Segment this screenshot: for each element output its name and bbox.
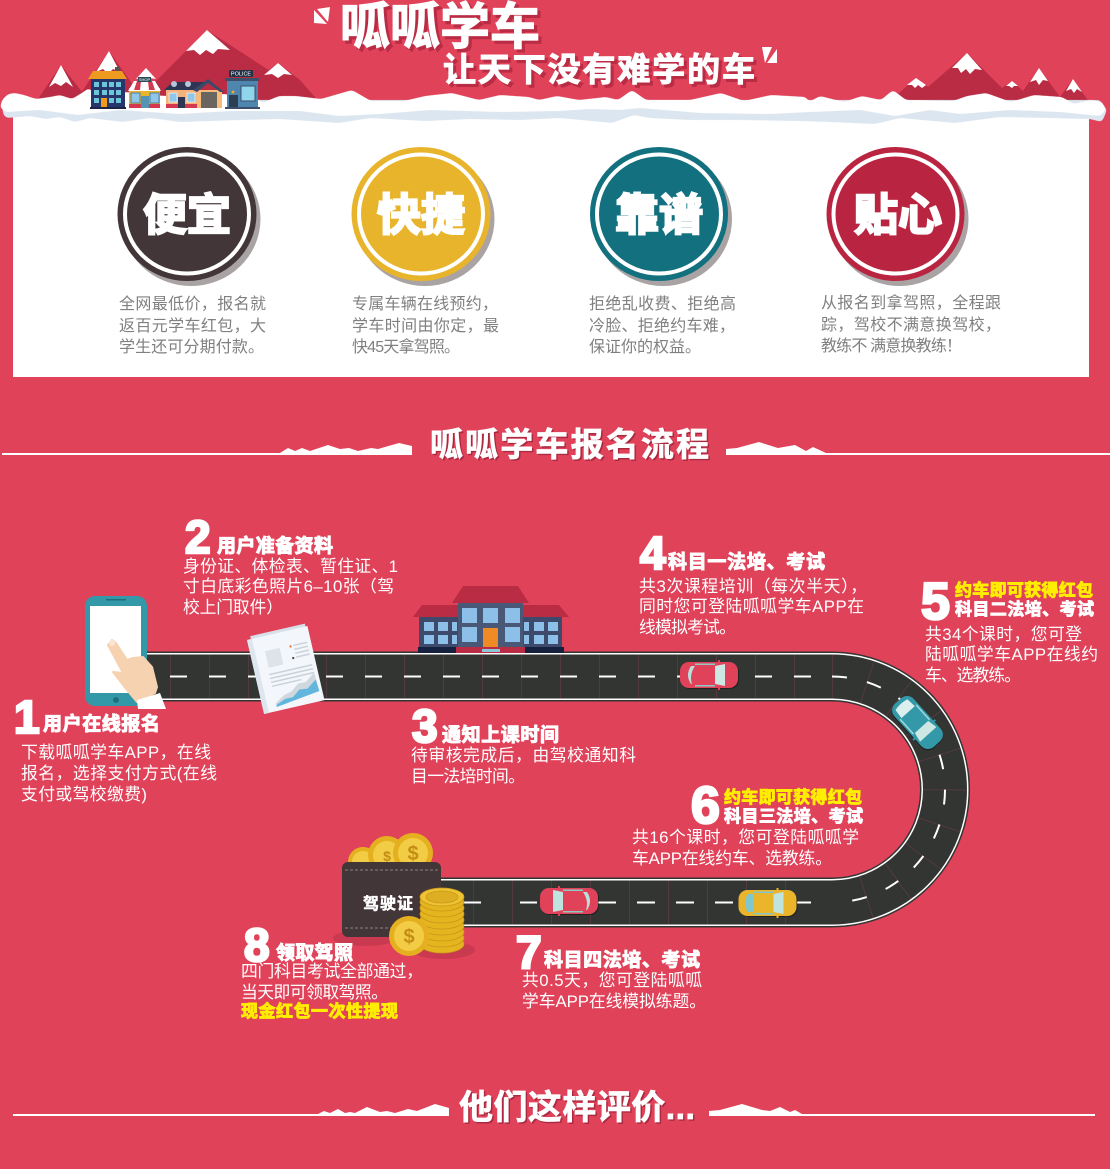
icon: house with garage (164, 79, 224, 108)
heading: enrolment process: 呱呱学车报名流程 (430, 426, 709, 463)
icon: red car, upper road (680, 660, 739, 690)
header mountains: left (36, 30, 321, 104)
step 2: 校上门取件） (183, 598, 283, 617)
heading: reviews (13, 1089, 1095, 1128)
title: 呱呱学车 (343, 2, 543, 58)
step 6: 车APP在线约车、选教练。 (632, 849, 832, 868)
icon: red car, lower road (540, 886, 599, 916)
road (146, 676, 945, 902)
icon: document (246, 623, 325, 714)
step 4: 4 (640, 527, 666, 579)
step 1: 用户在线报名 (43, 712, 160, 735)
step 8: 四门科目考试全部通过， (241, 962, 423, 981)
icon: buildings row (88, 67, 260, 109)
step 2: 2 (185, 511, 211, 563)
step 5: 5 (921, 573, 950, 631)
step 7: 科目四法培、考试 (544, 948, 700, 971)
step 6 (632, 777, 863, 868)
icon: front coin: $ (403, 926, 415, 948)
icon: right sparkle (762, 47, 777, 63)
title: 让天下没有难学的车 (446, 54, 758, 91)
icon: office building (88, 67, 127, 109)
step 6: 科目三法培、考试 (724, 806, 863, 826)
step 3 (411, 700, 636, 786)
step 8: 8 (244, 919, 270, 971)
icon: coins behind wallet: $ (383, 848, 391, 864)
step 3: 待审核完成后，由驾校通知科 (411, 746, 636, 765)
step 8 (241, 919, 423, 1021)
heading: enrolment process: 呱呱学车报名流程 (432, 428, 710, 464)
step 6: 共16个课时，您可登陆呱呱学 (632, 828, 859, 847)
text: fast: 专属车辆在线预约， (352, 295, 498, 313)
text: caring: 从报名到拿驾照，全程跟 (821, 293, 1001, 312)
title: 呱呱学车 (340, 0, 540, 55)
heading: reviews: 他们这样评价... (460, 1090, 696, 1128)
icon: coins behind wallet (348, 833, 433, 877)
step 1: 1 (14, 691, 40, 743)
text: reliable: 冷脸、拒绝约车难， (589, 317, 735, 335)
white benefits panel background (13, 112, 1089, 377)
step 2: 寸白底彩色照片6–10张（驾 (183, 577, 394, 596)
text: caring: 教练不 满意换教练！ (821, 336, 962, 355)
step 5: 科目二法培、考试 (955, 599, 1094, 619)
step 1: 支付或驾校缴费) (21, 785, 147, 804)
icon: coins behind wallet: $ (407, 843, 419, 865)
text: reliable: 保证你的权益。 (589, 338, 701, 356)
badge: reliable (590, 147, 732, 286)
icon: school building (413, 586, 569, 653)
step 5: 车、选教练。 (925, 666, 1021, 685)
icon: shop (128, 77, 161, 108)
step 7: 共0.5天，您可登陆呱呱 (522, 971, 702, 990)
step 3: 通知上课时间 (442, 724, 559, 746)
icon: left sparkle (314, 7, 330, 24)
icon: yellow car (738, 888, 798, 918)
step 8: 现金红包一次性提现 (241, 1001, 398, 1021)
step 4: 共3次课程培训（每次半天）， (639, 577, 867, 596)
text: fast (352, 295, 499, 356)
step 1 (14, 691, 217, 804)
step 6: 约车即可获得红包 (724, 787, 862, 807)
step 4 (639, 527, 867, 637)
step 2: 身份证、体检表、暂住证、1 (183, 557, 398, 576)
text: caring (821, 293, 1001, 355)
text: reliable: 拒绝乱收费、拒绝高 (589, 295, 736, 313)
step 2 (183, 511, 398, 617)
header mountains: right (897, 53, 1092, 106)
text: cheap: 返百元学车红包，大 (119, 317, 266, 335)
title: 让天下没有难学的车 (443, 51, 755, 88)
panel: benefits (118, 147, 1001, 356)
badge: caring: 贴心 (854, 191, 942, 240)
step 3: 目一法培时间。 (411, 767, 525, 786)
heading: reviews: 他们这样评价... (459, 1089, 695, 1127)
step 6: 6 (691, 777, 720, 835)
text: fast: 快45天拿驾照。 (352, 337, 460, 356)
badge: caring (826, 147, 968, 286)
icon: licence wallet with coins: 驾驶证 (363, 895, 413, 913)
icon: front coin (389, 916, 429, 956)
step 3: 3 (412, 700, 438, 752)
step 7 (516, 926, 706, 1011)
step 1: 下载呱呱学车APP，在线 (21, 743, 211, 762)
step 5: 共34个课时，您可登 (925, 625, 1082, 644)
heading: enrolment process (2, 426, 1110, 464)
step 4: 线模拟考试。 (639, 618, 736, 637)
icon: coin stack (420, 888, 464, 953)
badge: cheap: 便宜 (143, 191, 231, 240)
icon: licence wallet with coins (333, 833, 475, 959)
icon: shop: SHOP (139, 77, 150, 82)
step 1: 报名，选择支付方式(在线 (21, 764, 217, 783)
step 2: 用户准备资料 (217, 534, 333, 557)
step 4: 科目一法培、考试 (668, 550, 825, 573)
step 7: 学车APP在线模拟练题。 (522, 992, 706, 1011)
step 7: 7 (516, 926, 542, 978)
icon: phone with hand (85, 596, 166, 709)
text: fast: 学车时间由你定，最 (352, 317, 499, 335)
text: cheap: 全网最低价，报名就 (119, 295, 266, 313)
text: reliable (589, 295, 736, 356)
step 5 (921, 573, 1098, 685)
text: caring: 踪，驾校不满意换驾校， (821, 315, 1001, 334)
badge: cheap (118, 147, 260, 286)
badge: fast: 快捷 (377, 191, 465, 240)
badge: fast (352, 147, 494, 286)
step 5: 约车即可获得红包 (955, 580, 1093, 600)
badge: reliable: 靠谱 (615, 191, 703, 240)
step 8: 领取驾照 (276, 942, 353, 964)
step 4: 同时您可登陆呱呱学车APP在 (639, 597, 864, 616)
icon: police station (225, 70, 260, 109)
step 8: 当天即可领取驾照。 (241, 983, 388, 1002)
icon: police station: POLICE (231, 72, 251, 78)
icon: teal car, curve (887, 691, 949, 755)
text: cheap (119, 295, 266, 356)
text: cheap: 学生还可分期付款。 (119, 338, 264, 356)
title (314, 0, 777, 91)
snow band (0, 88, 1107, 124)
step 5: 陆呱呱学车APP在线约 (925, 645, 1098, 664)
